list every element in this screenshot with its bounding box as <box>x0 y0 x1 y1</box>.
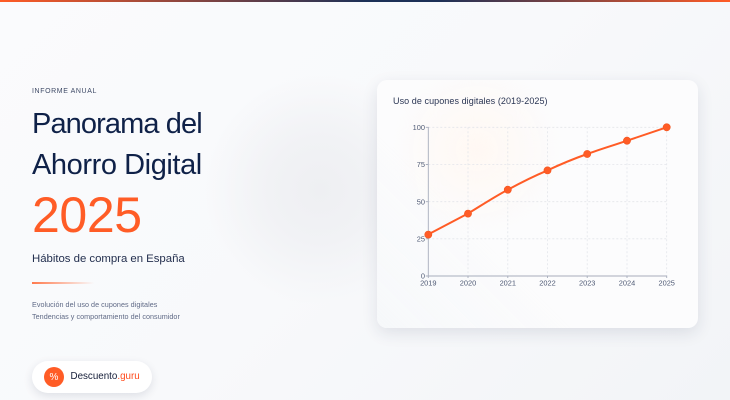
eyebrow label: INFORME ANUAL <box>32 88 97 94</box>
x axis labels: 2022 <box>539 279 556 288</box>
y axis labels: 0 <box>421 272 425 281</box>
title: Ahorro Digital <box>32 149 202 181</box>
x axis labels: 2024 <box>619 279 635 288</box>
y axis labels: 75 <box>417 160 425 169</box>
icon: percent badge <box>44 367 64 387</box>
subtitle: Hábitos de compra en España <box>32 252 185 264</box>
year: 2025 <box>32 187 142 243</box>
description text: Evolución del uso de cupones digitales <box>32 300 157 309</box>
data line <box>428 127 667 234</box>
x axis labels <box>420 279 675 288</box>
y axis labels: 25 <box>417 234 425 244</box>
data points <box>425 124 670 238</box>
title: Panorama del <box>32 108 202 140</box>
accent divider <box>32 282 94 284</box>
brand name: Descuento.guru <box>70 371 140 382</box>
x axis labels: 2021 <box>500 279 516 288</box>
x axis labels: 2023 <box>579 279 595 288</box>
x axis labels: 2020 <box>460 279 476 288</box>
orange glow <box>377 80 698 328</box>
title <box>32 108 202 181</box>
description text <box>32 300 180 321</box>
brand pill <box>32 361 152 393</box>
y axis labels <box>413 123 425 281</box>
x axis labels: 2025 <box>658 279 675 288</box>
x axis labels: 2019 <box>420 279 437 288</box>
axes <box>426 127 667 278</box>
y axis labels: 100 <box>413 123 425 132</box>
top gradient bar <box>0 0 730 2</box>
y axis labels: 50 <box>417 197 425 206</box>
icon: percent badge: % <box>50 372 58 383</box>
description text: Tendencias y comportamiento del consumidor <box>32 312 180 321</box>
panel: chart card <box>377 80 698 328</box>
chart title: Uso de cupones digitales (2019-2025) <box>393 96 548 106</box>
